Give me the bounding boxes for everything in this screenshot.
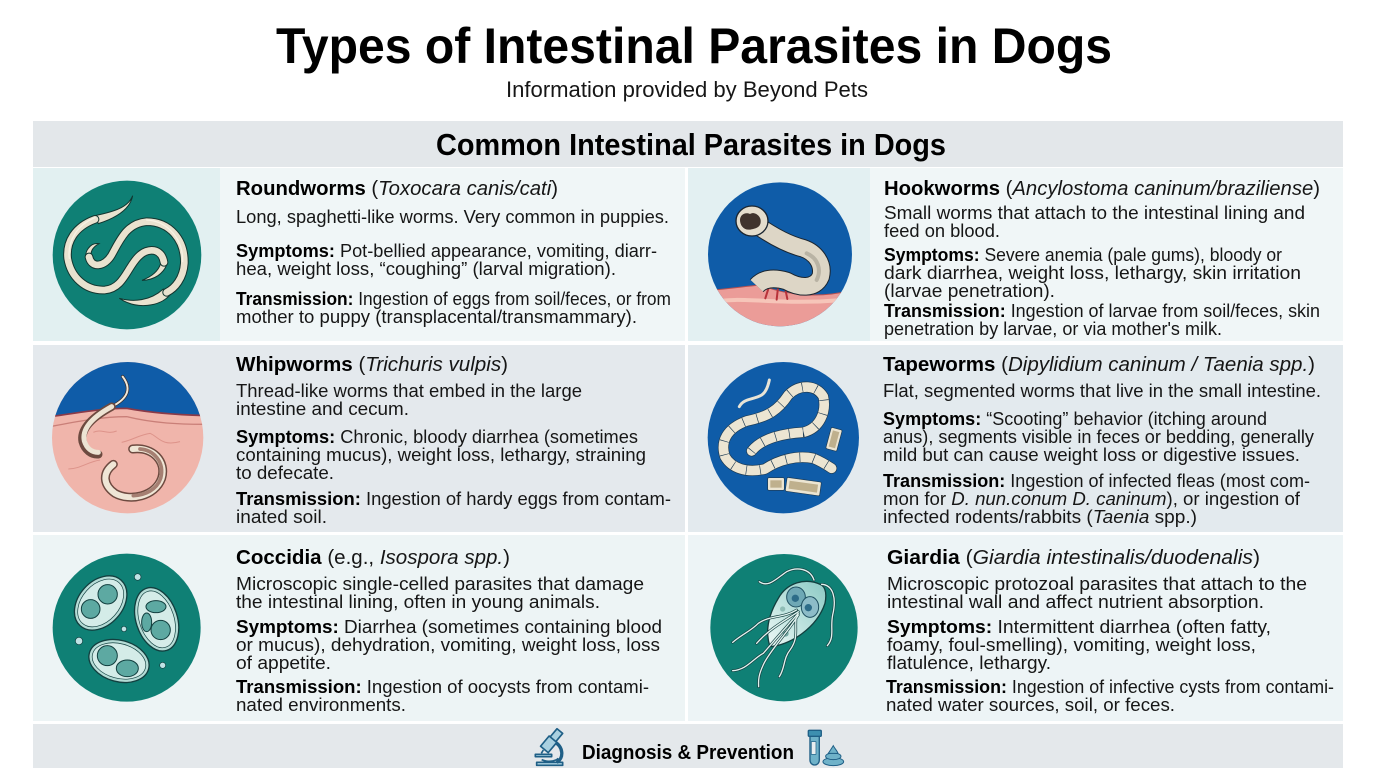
text: hookworms: Small worms that attach to the intestinal lining and [884, 203, 1305, 223]
icon: stool sample [823, 746, 844, 766]
text: coccidia: nated environments. [236, 695, 406, 715]
text: hookworms: penetration by larvae, or via mother's milk. [884, 319, 1222, 339]
text: giardia: intestinal wall and affect nutrient absorption. [887, 592, 1264, 612]
icon: hookworm [703, 182, 857, 332]
panel: hookworms [688, 168, 1343, 341]
text: hookworms: (larvae penetration). [884, 281, 1055, 301]
text: whipworms: Whipworms (Trichuris vulpis) [236, 353, 508, 376]
text: roundworms: Long, spaghetti-like worms. Very common in puppies. [236, 207, 669, 227]
panel: coccidia [33, 535, 685, 721]
text: roundworms: Transmission: Ingestion of eggs from soil/feces, or from [236, 289, 671, 309]
text: tapeworms: infected rodents/rabbits ( Taenia spp.) [883, 507, 1197, 527]
section header band [33, 121, 1343, 167]
text: coccidia: of appetite. [236, 653, 331, 673]
text: coccidia [236, 546, 662, 715]
text: tapeworms [883, 353, 1321, 527]
footer band [33, 724, 1343, 768]
icon: coccidia [53, 554, 201, 702]
text: tapeworms: mon for D. nun.conum D. caninum ), or ingestion of [883, 489, 1301, 509]
text: giardia: nated water sources, soil, or feces. [886, 695, 1175, 715]
text: whipworms: Symptoms: Chronic, bloody diarrhea (sometimes [236, 427, 638, 447]
text: hookworms: dark diarrhea, weight loss, lethargy, skin irritation [884, 263, 1301, 283]
text: giardia: Giardia (Giardia intestinalis/duodenalis ) [887, 546, 1260, 569]
text: roundworms: hea, weight loss, “coughing” (larval migration). [236, 259, 616, 279]
text: whipworms [236, 353, 671, 527]
text: whipworms: intestine and cecum. [236, 399, 409, 419]
text: tapeworms: anus), segments visible in feces or bedding, generally [883, 427, 1314, 447]
text: giardia: foamy, foul-smelling), vomiting, weight loss, [887, 635, 1256, 655]
text: coccidia: Coccidia (e.g., Isospora spp.) [236, 546, 510, 569]
text: whipworms: Thread-like worms that embed in the large [236, 381, 582, 401]
text: hookworms: Transmission: Ingestion of larvae from soil/feces, skin [884, 301, 1320, 321]
text: tapeworms: Tapeworms (Dipylidium caninum / Taenia spp.) [883, 353, 1315, 376]
text: coccidia: Microscopic single-celled parasites that damage [236, 574, 644, 594]
panel: roundworms [33, 168, 685, 341]
text: roundworms: Symptoms: Pot-bellied appearance, vomiting, diarr- [236, 241, 657, 261]
subtitle: Information provided by Beyond Pets [506, 77, 868, 102]
text: roundworms [236, 177, 671, 327]
text: giardia [886, 546, 1334, 715]
text: coccidia: or mucus), dehydration, vomiting, weight loss, loss [236, 635, 660, 655]
text: hookworms: Hookworms (Ancylostoma caninum/braziliense) [884, 177, 1320, 200]
text: roundworms: mother to puppy (transplacental/transmammary). [236, 307, 637, 327]
icon: microscope [535, 729, 563, 765]
icon: test tube [808, 730, 821, 765]
text: coccidia: Transmission: Ingestion of oocysts from contami- [236, 677, 649, 697]
text: whipworms: containing mucus), weight loss, lethargy, straining [236, 445, 646, 465]
text: hookworms: feed on blood. [884, 221, 1000, 241]
title: Types of Intestinal Parasites in Dogs [276, 18, 1112, 74]
text: hookworms [884, 177, 1320, 339]
text: whipworms: Transmission: Ingestion of hardy eggs from contam- [236, 489, 671, 509]
text: coccidia: the intestinal lining, often in young animals. [236, 592, 600, 612]
text: roundworms: Roundworms (Toxocara canis/cati) [236, 177, 558, 200]
panel: giardia [688, 535, 1343, 721]
icon: giardia [710, 554, 858, 701]
panel: whipworms [33, 345, 685, 532]
text: tapeworms: Symptoms: “Scooting” behavior (itching around [883, 409, 1267, 429]
text: whipworms: inated soil. [236, 507, 327, 527]
section heading: Common Intestinal Parasites in Dogs [436, 127, 946, 162]
text: giardia: flatulence, lethargy. [887, 653, 1051, 673]
panel: tapeworms [688, 345, 1343, 532]
text: hookworms: Symptoms: Severe anemia (pale gums), bloody or [884, 245, 1282, 265]
icon: whipworm [50, 358, 207, 513]
text: giardia: Symptoms: Intermittent diarrhea (often fatty, [887, 617, 1271, 637]
text: tapeworms: mild but can cause weight loss or digestive issues. [883, 445, 1300, 465]
text: tapeworms: Transmission: Ingestion of infected fleas (most com- [883, 471, 1310, 491]
icon: roundworms [53, 181, 201, 329]
text: coccidia: Symptoms: Diarrhea (sometimes containing blood [236, 617, 662, 637]
text: giardia: Microscopic protozoal parasites that attach to the [887, 574, 1307, 594]
text: giardia: Transmission: Ingestion of infective cysts from contami- [886, 677, 1334, 697]
text: whipworms: to defecate. [236, 463, 334, 483]
footer heading: Diagnosis & Prevention [582, 742, 794, 764]
text: tapeworms: Flat, segmented worms that live in the small intestine. [883, 381, 1321, 401]
icon: tapeworm [708, 362, 859, 513]
